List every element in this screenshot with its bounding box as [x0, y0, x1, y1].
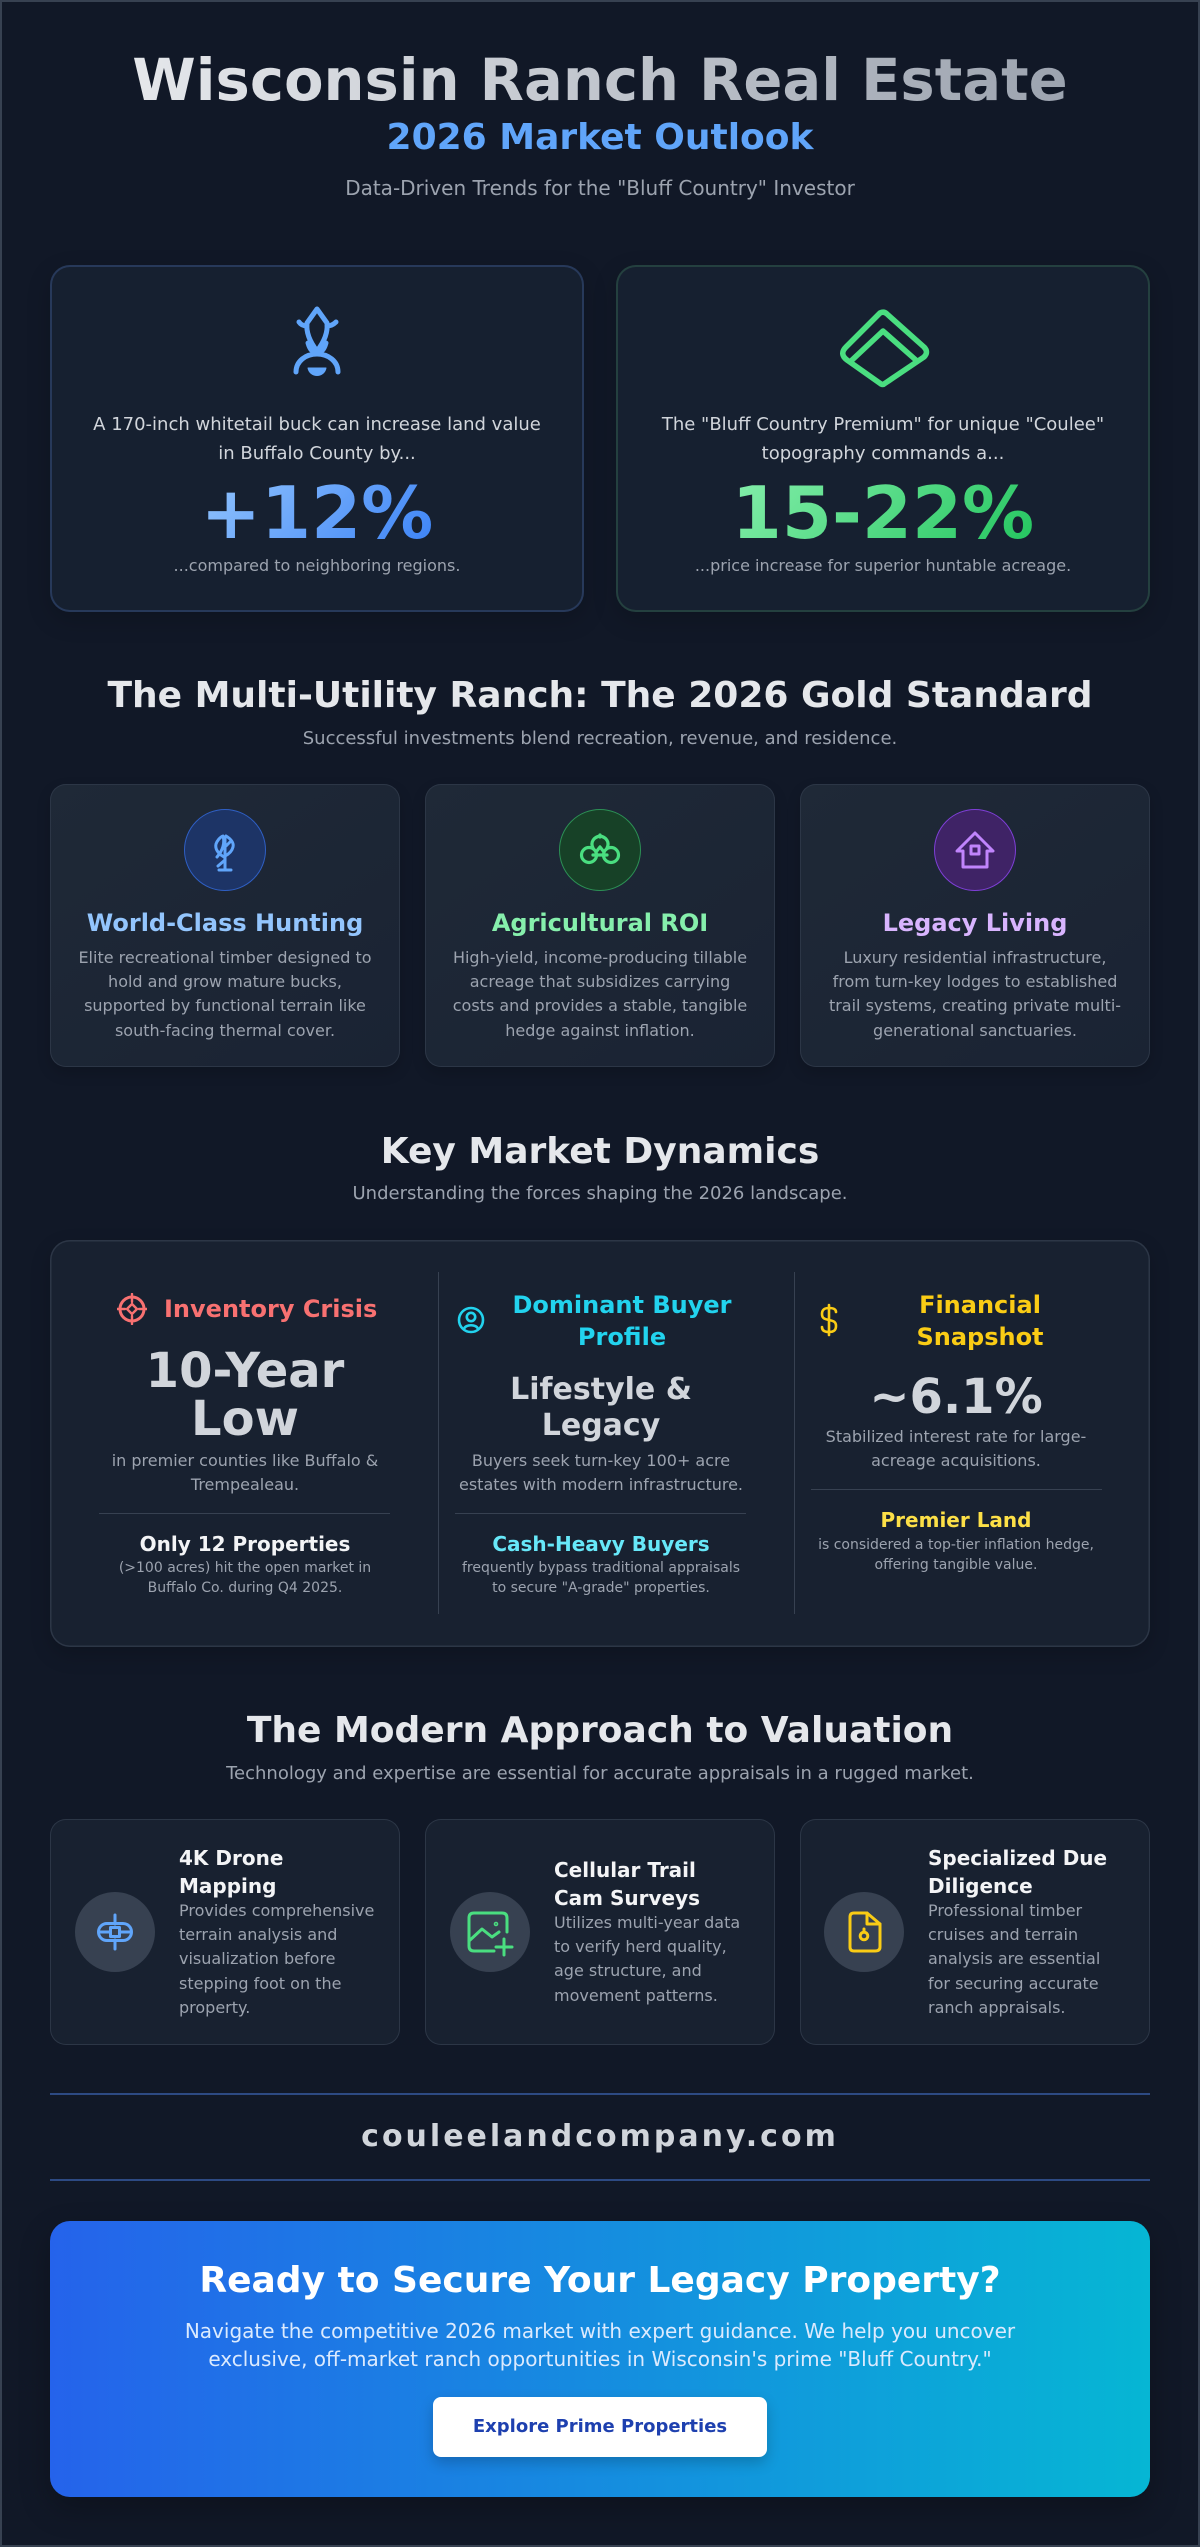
stat description: in Buffalo County by...	[218, 443, 416, 464]
card description: ranch appraisals.	[928, 1998, 1066, 2017]
large value: ~6.1%	[869, 1369, 1043, 1425]
secondary description	[818, 1537, 1094, 1573]
card description: stepping foot on the	[179, 1974, 341, 1993]
card description: for securing accurate	[928, 1974, 1099, 1993]
column: financial snapshot	[811, 1291, 1102, 1573]
panel: agricultural ROI	[425, 784, 775, 1067]
value description: Buyers seek turn-key 100+ acre	[472, 1451, 730, 1470]
card description: Professional timber	[928, 1901, 1082, 1920]
icon: house	[934, 809, 1016, 891]
card description: hold and grow mature bucks,	[108, 972, 342, 991]
rule	[99, 1513, 390, 1514]
card description: Utilizes multi-year data	[554, 1913, 740, 1932]
secondary description: offering tangible value.	[875, 1557, 1037, 1573]
CTA button	[433, 2397, 767, 2457]
secondary title: Only 12 Properties	[140, 1532, 350, 1556]
secondary title: Premier Land	[881, 1508, 1031, 1532]
icon: buck	[294, 306, 340, 376]
card description: to verify herd quality,	[554, 1937, 727, 1956]
card description: generational sanctuaries.	[873, 1021, 1077, 1040]
large value: Legacy	[542, 1408, 660, 1443]
card description: visualization before	[179, 1949, 336, 1968]
card title	[928, 1846, 1107, 1898]
heading: modern approach: The Modern Approach to Valuation	[247, 1710, 953, 1751]
CTA text: exclusive, off-market ranch opportunities in Wisconsin's prime "Bluff Country."	[208, 2346, 992, 2370]
card description: acreage that subsidizes carrying	[470, 972, 730, 991]
CTA heading: Ready to Secure Your Legacy Property?	[199, 2260, 1001, 2301]
large value: Low	[191, 1391, 299, 1447]
column heading: Dominant Buyer	[512, 1291, 731, 1319]
stat value: +12%	[201, 471, 433, 555]
card description: costs and provides a stable, tangible	[453, 996, 747, 1015]
stat description: topography commands a...	[762, 443, 1004, 464]
secondary description: to secure "A-grade" properties.	[492, 1580, 710, 1596]
CTA text	[185, 2319, 1016, 2370]
panel: legacy living	[800, 784, 1150, 1067]
card description	[179, 1901, 374, 2017]
card title: Specialized Due	[928, 1846, 1107, 1870]
icon: document	[824, 1892, 904, 1972]
secondary description	[119, 1560, 371, 1596]
column heading: Financial	[919, 1291, 1041, 1319]
website banner	[50, 2093, 1150, 2181]
stat description	[662, 414, 1104, 464]
card description	[554, 1913, 740, 2005]
section subtitle: Successful investments blend recreation, revenue, and residence.	[303, 728, 897, 749]
card description: age structure, and	[554, 1961, 702, 1980]
card description: property.	[179, 1998, 250, 2017]
stat note: ...compared to neighboring regions.	[174, 556, 460, 575]
secondary description: Buffalo Co. during Q4 2025.	[148, 1580, 342, 1596]
icon: person circle	[458, 1306, 484, 1334]
section subtitle: Technology and expertise are essential for accurate appraisals in a rugged market.	[226, 1763, 974, 1784]
column heading	[512, 1291, 732, 1351]
panel: trail cam surveys	[425, 1819, 775, 2045]
secondary description: frequently bypass traditional appraisals	[462, 1560, 740, 1576]
panel: market dynamics	[50, 1240, 1150, 1647]
CTA text: Navigate the competitive 2026 market with expert guidance. We help you uncover	[185, 2319, 1015, 2343]
heading: multi-utility ranch: The Multi-Utility Ranch: The 2026 Gold Standard	[107, 675, 1093, 716]
card description	[829, 948, 1121, 1040]
column heading: Inventory Crisis	[164, 1295, 377, 1323]
card title: Cellular Trail	[554, 1858, 696, 1882]
card description: supported by functional terrain like	[84, 996, 366, 1015]
card description	[78, 948, 372, 1040]
card description	[453, 948, 747, 1040]
CTA button: Explore Prime Properties	[473, 2416, 727, 2437]
value description	[112, 1451, 378, 1494]
large value	[510, 1372, 692, 1443]
panel: world-class hunting	[50, 784, 400, 1067]
card title: 4K Drone	[179, 1846, 283, 1870]
subtitle: 2026 Market Outlook	[387, 117, 813, 158]
column: inventory crisis	[99, 1293, 390, 1596]
website address: couleelandcompany.com	[361, 2119, 839, 2154]
panel: call to action	[50, 2221, 1150, 2497]
card title: Legacy Living	[883, 909, 1067, 937]
panel: specialized due diligence	[800, 1819, 1150, 2045]
secondary description	[462, 1560, 740, 1596]
secondary title: Cash-Heavy Buyers	[492, 1532, 710, 1556]
card description: from turn-key lodges to established	[833, 972, 1117, 991]
card title: Mapping	[179, 1874, 276, 1898]
icon: target	[117, 1293, 147, 1325]
value description: estates with modern infrastructure.	[459, 1475, 743, 1494]
icon: drone	[75, 1892, 155, 1972]
icon: dollar	[820, 1304, 838, 1336]
column heading: Profile	[578, 1323, 666, 1351]
column heading	[916, 1291, 1044, 1351]
card description: south-facing thermal cover.	[115, 1021, 335, 1040]
value description: Stabilized interest rate for large-	[826, 1427, 1086, 1446]
card title: Diligence	[928, 1874, 1033, 1898]
card description: Provides comprehensive	[179, 1901, 374, 1920]
rule	[455, 1513, 746, 1514]
card title: Cam Surveys	[554, 1886, 700, 1910]
card title	[554, 1858, 700, 1910]
card description: Elite recreational timber designed to	[78, 948, 372, 967]
card title: Agricultural ROI	[492, 909, 708, 937]
stat value: 15-22%	[732, 471, 1034, 555]
divider left	[438, 1272, 439, 1614]
card description: movement patterns.	[554, 1986, 718, 2005]
value description: in premier counties like Buffalo &	[112, 1451, 378, 1470]
panel: bluff country premium stat	[616, 265, 1150, 612]
large value: Lifestyle &	[510, 1372, 692, 1407]
stat description: The "Bluff Country Premium" for unique "Coulee"	[662, 414, 1104, 435]
icon: tree	[184, 809, 266, 891]
title: Wisconsin Ranch Real Estate	[132, 47, 1068, 114]
stat description: A 170-inch whitetail buck can increase land value	[93, 414, 541, 435]
secondary description: (>100 acres) hit the open market in	[119, 1560, 371, 1576]
card title: World-Class Hunting	[87, 909, 363, 937]
section subtitle: Understanding the forces shaping the 2026 landscape.	[352, 1183, 848, 1204]
card description: analysis are essential	[928, 1949, 1100, 1968]
icon: image plus	[450, 1892, 530, 1972]
card description: cruises and terrain	[928, 1925, 1078, 1944]
card description: trail systems, creating private multi-	[829, 996, 1121, 1015]
column heading: Snapshot	[916, 1323, 1044, 1351]
card description: hedge against inflation.	[505, 1021, 695, 1040]
large value	[146, 1343, 344, 1447]
large value: 10-Year	[146, 1343, 344, 1399]
value description	[459, 1451, 743, 1494]
icon: layered diamond	[840, 309, 930, 388]
column: dominant buyer	[455, 1291, 746, 1596]
panel: whitetail land value stat	[50, 265, 584, 612]
secondary description: is considered a top-tier inflation hedge,	[818, 1537, 1094, 1553]
value description	[826, 1427, 1086, 1470]
divider right	[794, 1272, 795, 1614]
value description: Trempealeau.	[191, 1475, 299, 1494]
card description: High-yield, income-producing tillable	[453, 948, 747, 967]
icon: clover	[559, 809, 641, 891]
card description	[928, 1901, 1100, 2017]
stat note: ...price increase for superior huntable acreage.	[695, 556, 1071, 575]
card description: terrain analysis and	[179, 1925, 337, 1944]
card title	[179, 1846, 283, 1898]
tagline: Data-Driven Trends for the "Bluff Country" Investor	[345, 176, 855, 200]
card description: Luxury residential infrastructure,	[844, 948, 1106, 967]
heading: key market dynamics: Key Market Dynamics	[381, 1131, 819, 1172]
panel: drone mapping	[50, 1819, 400, 2045]
rule	[811, 1489, 1102, 1490]
value description: acreage acquisitions.	[871, 1451, 1041, 1470]
stat description	[93, 414, 541, 464]
